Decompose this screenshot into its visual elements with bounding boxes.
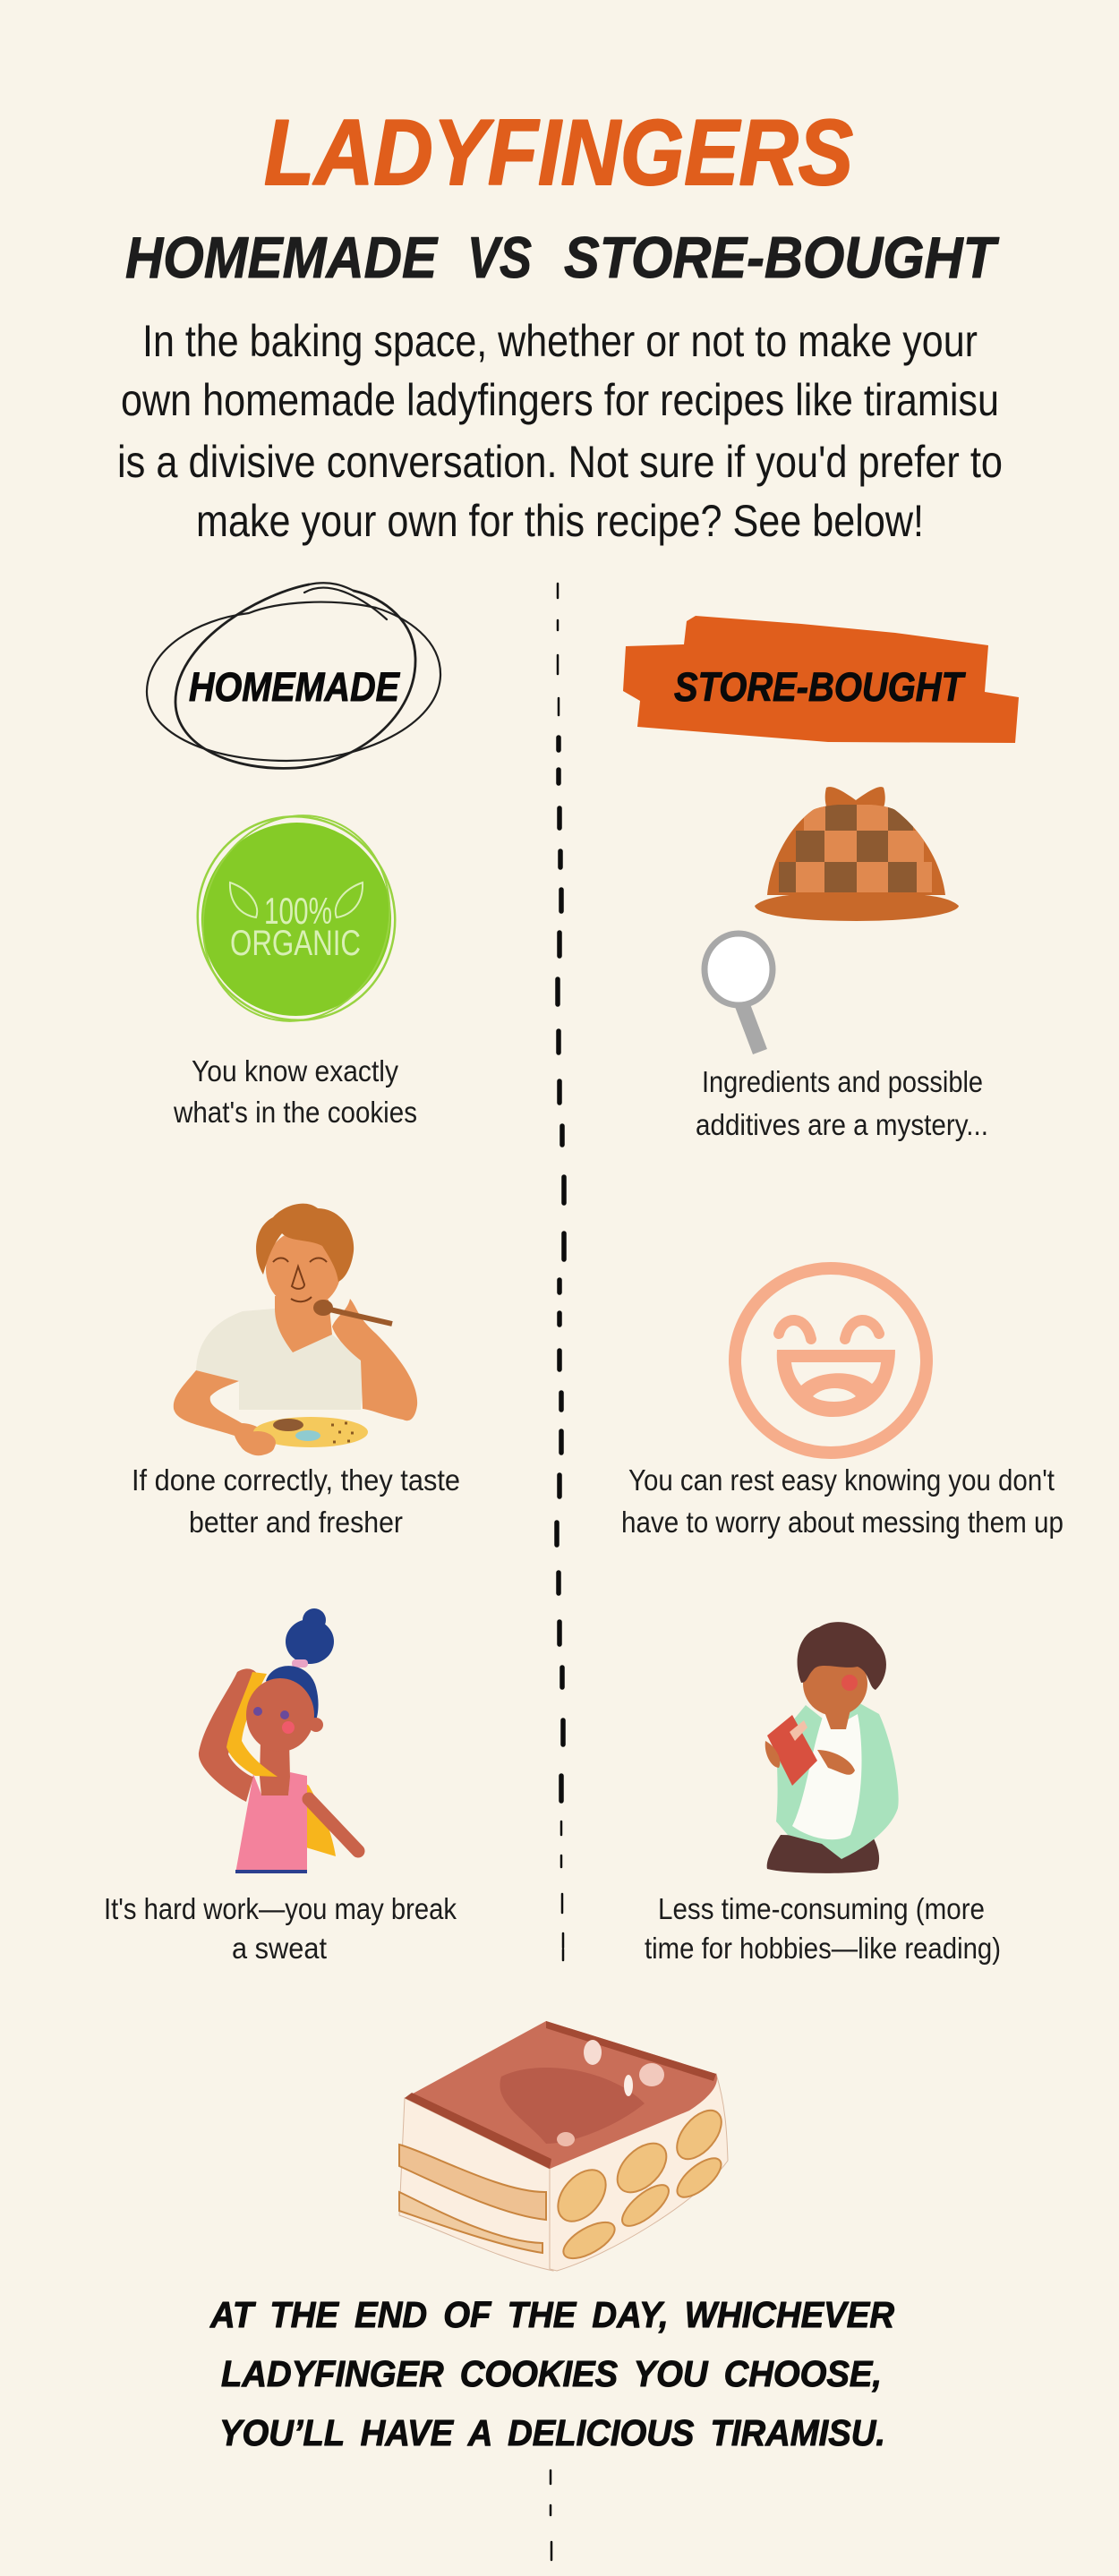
- hair bun: [286, 1619, 334, 1664]
- icon: scribbled circle: [147, 583, 440, 768]
- icon: 100% organic badge: ORGANIC: [230, 924, 361, 963]
- closing statement: LADYFINGER COOKIES YOU CHOOSE,: [221, 2353, 882, 2394]
- lowered arm: [309, 1799, 358, 1851]
- brush stroke: [623, 616, 1019, 743]
- face: [246, 1678, 314, 1752]
- caption: less time-consuming: time for hobbies—like reading): [645, 1932, 1001, 1965]
- right arm: [332, 1299, 417, 1420]
- subtitle: STORE-BOUGHT: [564, 225, 1000, 290]
- caption: know what's in cookies: [173, 1054, 417, 1129]
- caption: know what's in cookies: what's in the cookies: [173, 1096, 417, 1129]
- head: [266, 1230, 341, 1309]
- icon: laughing face: [735, 1268, 927, 1453]
- subtitle: VS: [467, 225, 532, 290]
- book: [767, 1715, 817, 1786]
- heading text: HOMEMADE: [189, 664, 401, 710]
- icon: woman wiping sweat: [199, 1608, 358, 1873]
- icon: 100% organic badge: [176, 791, 416, 1045]
- homemade heading with scribbled circle: [147, 583, 440, 768]
- towel over head: [226, 1672, 278, 1777]
- tank top: [235, 1772, 307, 1873]
- plate: [253, 1417, 368, 1447]
- caption: hard work: a sweat: [232, 1932, 327, 1965]
- caption: know what's in cookies: You know exactly: [192, 1054, 398, 1088]
- hair: [266, 1666, 319, 1723]
- left ladyfinger bands: [399, 2145, 546, 2220]
- face lines: [273, 1258, 327, 1301]
- caption: rest easy: You can rest easy knowing you don't: [628, 1463, 1055, 1497]
- right side: [550, 2074, 728, 2271]
- hair: [798, 1622, 886, 1690]
- icon: detective hat: [755, 787, 959, 921]
- legs: [767, 1835, 879, 1873]
- jacket: [776, 1701, 899, 1859]
- closing statement: AT THE END OF THE DAY, WHICHEVER: [209, 2294, 894, 2335]
- caption: ingredients mystery: additives are a mystery...: [696, 1108, 988, 1141]
- caption: rest easy: have to worry about messing them up: [621, 1506, 1063, 1539]
- closing statement: YOU’LL HAVE A DELICIOUS TIRAMISU.: [219, 2412, 885, 2453]
- intro text block: In the baking space, whether or not to make your: [142, 316, 978, 366]
- heading text: STORE-BOUGHT: [674, 664, 966, 710]
- shirt: [196, 1309, 364, 1410]
- icon: 100% organic badge: 100%: [264, 890, 332, 932]
- subtitle: [125, 225, 1000, 290]
- towel back: [293, 1774, 336, 1856]
- caption: hard work: [104, 1892, 457, 1965]
- icon: person eating: [174, 1204, 417, 1455]
- icon: magnifying glass: [705, 934, 773, 1052]
- closing statement: [209, 2294, 894, 2453]
- caption: tastes better: If done correctly, they taste: [132, 1463, 460, 1497]
- caption: hard work: It's hard work—you may break: [104, 1892, 457, 1925]
- spoon: [314, 1306, 392, 1324]
- right ladyfingers: [549, 2103, 730, 2265]
- hand over plate: [240, 1431, 276, 1454]
- white shirt: [792, 1714, 862, 1839]
- icon: person reading: [765, 1622, 899, 1873]
- caption: tastes better: better and fresher: [189, 1506, 403, 1539]
- vertical dashed divider: [551, 584, 564, 2560]
- caption: tastes better: [132, 1463, 460, 1539]
- caption: ingredients mystery: [696, 1065, 988, 1141]
- hair: [256, 1204, 354, 1282]
- cocoa top: [405, 2021, 717, 2169]
- neck: [260, 1741, 290, 1796]
- intro text block: [117, 316, 1003, 546]
- intro text block: is a divisive conversation. Not sure if you'd prefer to: [117, 437, 1003, 487]
- illustration: tiramisu slice: [399, 2021, 730, 2271]
- intro text block: own homemade ladyfingers for recipes like tiramisu: [121, 375, 999, 425]
- subtitle: HOMEMADE: [125, 225, 438, 290]
- left side: [399, 2098, 553, 2271]
- left arm: [174, 1370, 275, 1455]
- head: [803, 1651, 867, 1716]
- intro text block: make your own for this recipe? See below!: [196, 496, 924, 546]
- neck: [275, 1296, 332, 1352]
- caption: less time-consuming: Less time-consuming (more: [658, 1892, 985, 1925]
- raised arm: [199, 1668, 260, 1802]
- caption: less time-consuming: [645, 1892, 1001, 1965]
- caption: rest easy: [621, 1463, 1063, 1539]
- title: LADYFINGERS: [264, 101, 853, 205]
- store-bought heading with orange brush stroke: [623, 616, 1019, 743]
- caption: ingredients mystery: Ingredients and possible: [702, 1065, 983, 1098]
- hands: [765, 1741, 855, 1775]
